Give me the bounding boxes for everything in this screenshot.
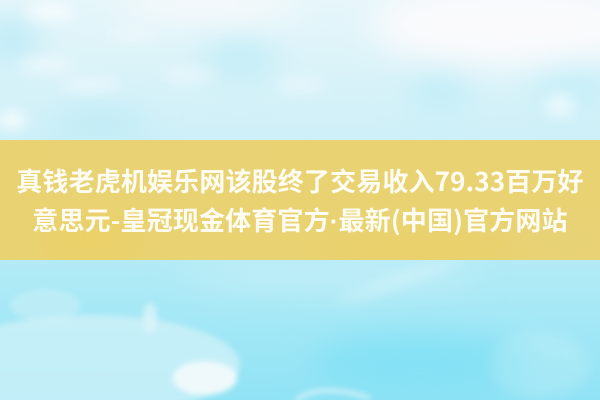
banner: yellow title band: [0, 140, 600, 260]
title line 2: 意思元-皇冠现金体育官方·最新(中国)官方网站: [32, 201, 568, 238]
title line 1: 真钱老虎机娱乐网该股终了交易收入79.33百万好: [16, 162, 584, 199]
banner texture: [63, 228, 117, 252]
